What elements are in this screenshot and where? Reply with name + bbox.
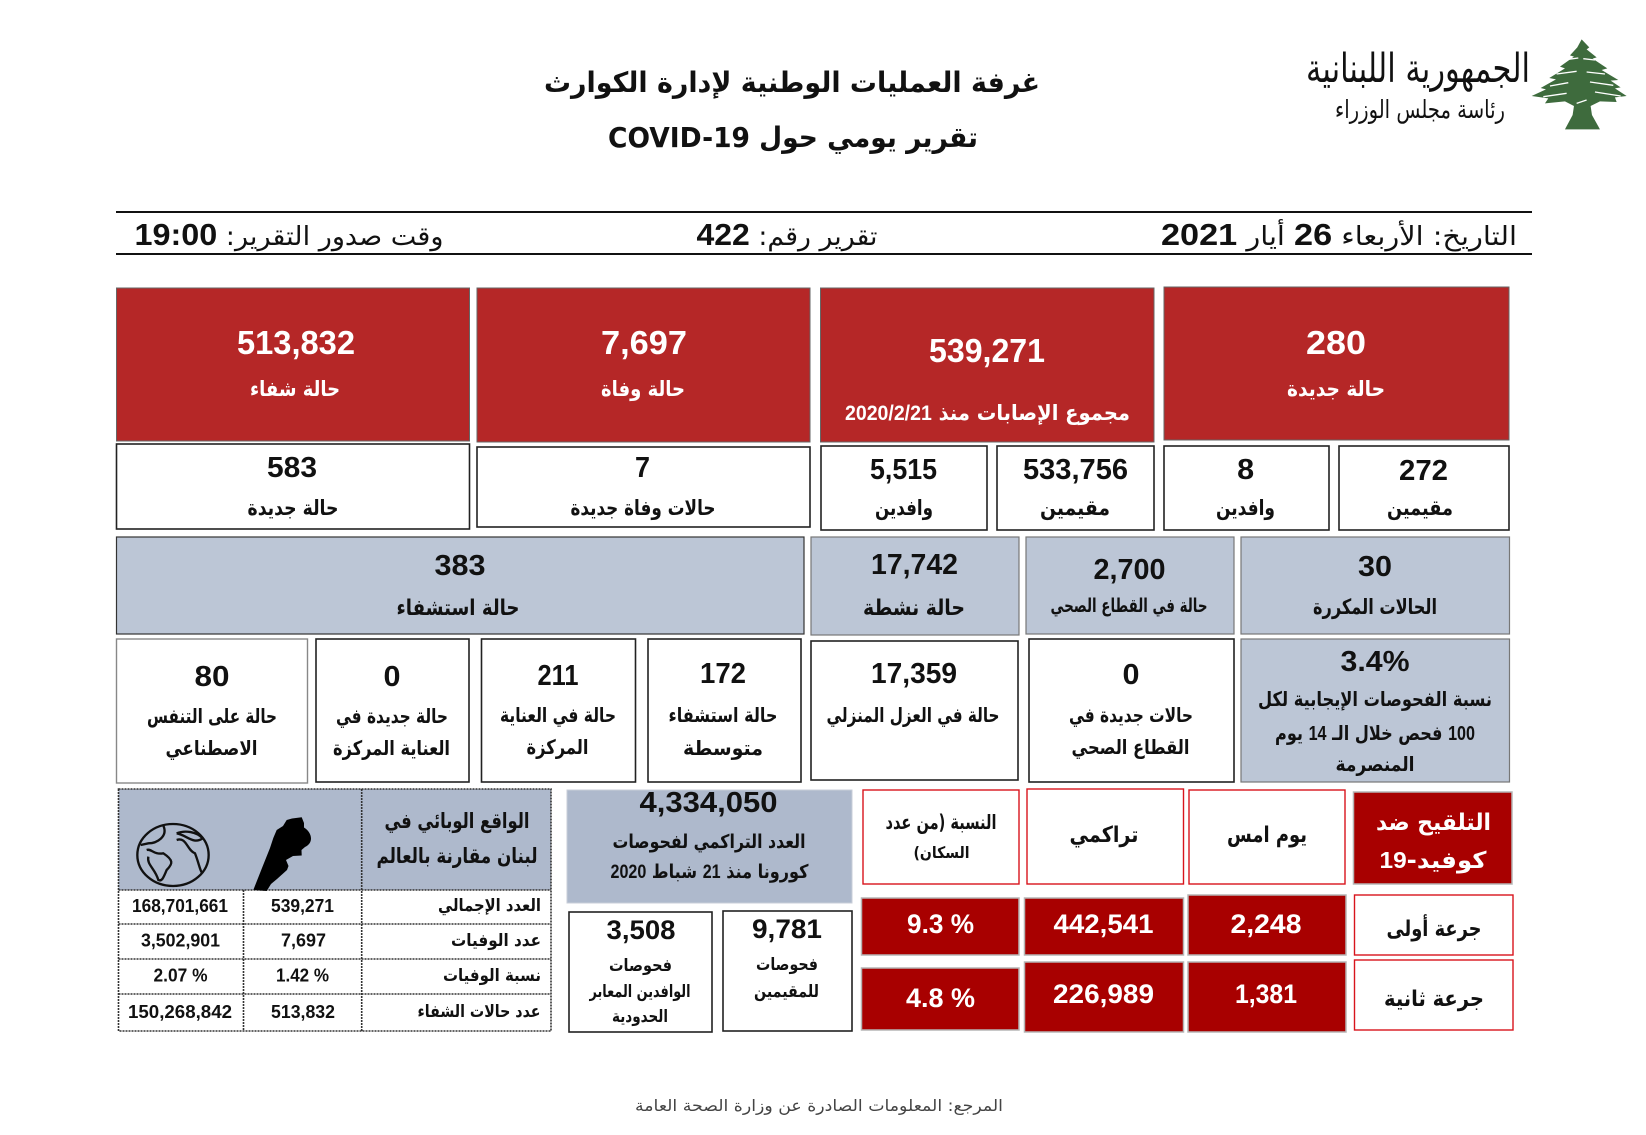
value: 0 [384, 661, 400, 693]
row label: second dose [1354, 960, 1513, 1030]
value: 211 [538, 660, 578, 692]
title [544, 66, 1040, 154]
column header: population share [863, 790, 1019, 884]
value: 30 [1358, 551, 1392, 583]
panel: new deaths [477, 447, 810, 527]
label line 2: كورونا منذ 21 شباط 2020 [610, 861, 809, 883]
label: وافدين [1216, 496, 1275, 520]
row: recoveries: 150,268,842 [128, 1002, 232, 1022]
label: حالة شفاء [250, 377, 340, 401]
panel: moderate hospital cases [648, 639, 801, 782]
panel: deaths [477, 288, 810, 442]
label: حالة في العزل المنزلي [826, 703, 1000, 728]
label: فحوصات [756, 955, 818, 975]
panel: active cases [811, 537, 1019, 635]
label: حالات وفاة جديدة [570, 496, 716, 520]
label: حالة على التنفس [147, 704, 277, 728]
row: deaths [141, 930, 541, 951]
row label: first dose: جرعة أولى [1386, 913, 1482, 942]
panel: resident tests [723, 911, 852, 1031]
value: 5,515 [870, 454, 937, 486]
label line 1: نسبة الفحوصات الإيجابية لكل [1258, 687, 1492, 711]
column header: yesterday: يوم امس [1227, 823, 1307, 848]
row: fatality rate: نسبة الوفيات [443, 966, 541, 986]
label: حالة في القطاع الصحي [1050, 595, 1208, 617]
value: 583 [267, 452, 317, 484]
panel: health sector cases [1026, 537, 1234, 634]
second dose cumulative: 226,989 [1053, 979, 1154, 1009]
label: حالة وفاة [601, 377, 685, 401]
panel: new ICU cases [316, 639, 469, 782]
value: 533,756 [1023, 454, 1128, 486]
value: 272 [1399, 455, 1448, 487]
table heading: الواقع الوبائي في [384, 809, 530, 833]
label line 3: المنصرمة [1336, 752, 1414, 776]
panel: repeated cases [1241, 537, 1510, 634]
value: 17,742 [871, 549, 958, 581]
heading: التلقيح ضد [1376, 810, 1491, 836]
panel: hospitalised [116, 537, 804, 634]
panel: new cases residents [1339, 446, 1509, 530]
panel: total cases [820, 288, 1154, 442]
report number: تقرير رقم: 422 [696, 217, 878, 252]
logo calligraphy: republic name: الجمهورية اللبنانية [1306, 46, 1530, 92]
icon: Lebanon map [253, 817, 311, 891]
row: deaths: 7,697 [281, 930, 326, 950]
value: 7,697 [601, 324, 687, 361]
panel: ICU cases [482, 639, 636, 782]
value: 8 [1237, 454, 1254, 486]
first dose yesterday: 2,248 [1230, 909, 1302, 939]
table header background [118, 789, 551, 890]
row: recoveries: 513,832 [271, 1002, 335, 1022]
source note: المرجع: المعلومات الصادرة عن وزارة الصحة العامة [635, 1096, 1003, 1116]
value: 280 [1306, 324, 1366, 361]
logo calligraphy: presidency: رئاسة مجلس الوزراء [1335, 95, 1505, 124]
value: 539,271 [929, 332, 1045, 369]
first dose cumulative [1024, 898, 1184, 955]
logo: Lebanese Republic presidency of council of ministers [1306, 39, 1627, 129]
icon: globe [137, 824, 209, 886]
row: total cases: 168,701,661 [132, 896, 228, 916]
panel: border tests [569, 912, 712, 1032]
label: حالة جديدة في [336, 704, 448, 729]
label line 2: القطاع الصحي [1072, 735, 1190, 760]
report info bar [116, 211, 1532, 255]
heading: operations room: غرفة العمليات الوطنية لإدارة الكوارث [544, 66, 1040, 99]
value: 9,781 [752, 914, 822, 944]
row: deaths: عدد الوفيات [451, 931, 541, 951]
row label: second dose: جرعة ثانية [1384, 987, 1484, 1012]
label: حالة في العناية [500, 703, 616, 728]
value: 4,334,050 [640, 787, 778, 819]
value: 3.4% [1340, 646, 1410, 678]
panel: recoveries [116, 288, 470, 441]
value: 3,508 [606, 915, 676, 945]
panel: cumulative tests [567, 787, 852, 903]
column header: cumulative: تراكمي [1070, 823, 1138, 848]
panel: positivity rate [1241, 639, 1510, 782]
label: مقيمين [1387, 496, 1453, 520]
value: 2,700 [1094, 554, 1166, 586]
panel: on ventilator [116, 639, 308, 783]
label: مقيمين [1040, 496, 1110, 520]
label line 2: متوسطة [683, 736, 763, 760]
row label: first dose [1354, 895, 1513, 955]
value: 172 [700, 658, 746, 690]
date: التاريخ: الأربعاء 26 أيار 2021 [1161, 217, 1517, 252]
label line 2: الوافدين المعابر [589, 982, 690, 1002]
label: حالة جديدة [248, 496, 338, 520]
value: 513,832 [237, 324, 355, 361]
heading line 2: كوفيد-19 [1380, 847, 1487, 874]
second dose percent [862, 968, 1019, 1030]
panel: new health sector cases [1029, 639, 1234, 782]
row: total cases: 539,271 [271, 896, 334, 916]
second dose yesterday: 1,381 [1235, 979, 1297, 1009]
value: 383 [434, 550, 486, 582]
label: حالة استشفاء [668, 703, 778, 727]
panel: new cases expatriates [1164, 446, 1329, 530]
label: فحوصات [609, 956, 672, 976]
first dose yesterday [1188, 895, 1346, 955]
label: حالة جديدة [1287, 377, 1385, 401]
report time: وقت صدور التقرير: 19:00 [134, 217, 444, 252]
column header: yesterday [1189, 790, 1345, 884]
panel: vaccination header [1354, 792, 1512, 884]
label line 2: المركزة [526, 735, 588, 759]
heading: daily report: تقرير يومي حول COVID-19 [608, 121, 978, 154]
panel: Lebanon vs world table [118, 789, 551, 1031]
row: recoveries: عدد حالات الشفاء [418, 1002, 540, 1022]
label line 3: الحدودية [612, 1007, 668, 1027]
row: total cases: العدد الإجمالي [438, 896, 541, 916]
first dose cumulative: 442,541 [1054, 909, 1154, 939]
second dose cumulative [1024, 962, 1184, 1032]
row: fatality rate: 2.07 % [154, 966, 208, 986]
label line 2: 100 فحص خلال الـ 14 يوم [1275, 721, 1475, 745]
label line 2: للمقيمين [754, 982, 819, 1002]
column header: cumulative [1027, 789, 1184, 884]
row: deaths: 3,502,901 [141, 930, 220, 950]
icon: cedar tree [1532, 39, 1627, 129]
row: total cases [132, 896, 541, 916]
value: 0 [1122, 659, 1140, 691]
panel: total cases residents [997, 446, 1154, 530]
row: fatality rate [154, 966, 541, 986]
value: 7 [635, 452, 650, 484]
second dose yesterday [1188, 962, 1346, 1032]
panel: home isolation [811, 641, 1018, 780]
table heading line 2: لبنان مقارنة بالعالم [376, 844, 538, 868]
row: fatality rate: 1.42 % [276, 966, 329, 986]
label: حالة نشطة [863, 596, 965, 621]
panel: new cases [1164, 287, 1509, 440]
value: 17,359 [871, 658, 957, 690]
column header: population share: السكان) [914, 843, 970, 862]
label: مجموع الإصابات منذ 2020/2/21 [845, 401, 1130, 425]
second dose percent: 4.8 % [906, 983, 975, 1013]
label line 2: العناية المركزة [333, 736, 450, 760]
label: الحالات المكررة [1313, 595, 1437, 619]
panel: new recoveries [116, 444, 470, 529]
first dose percent: 9.3 % [907, 909, 974, 939]
value: 80 [194, 661, 230, 693]
row: recoveries [128, 1002, 540, 1022]
first dose percent [862, 898, 1019, 955]
column header: population share: النسبة (من عدد [886, 810, 996, 834]
label: حالات جديدة في [1069, 703, 1193, 728]
panel: total cases expatriates [821, 446, 987, 530]
label: العدد التراكمي لفحوصات [612, 831, 806, 853]
label: وافدين [875, 496, 933, 520]
label line 2: الاصطناعي [166, 736, 258, 761]
label: حالة استشفاء [396, 596, 520, 621]
